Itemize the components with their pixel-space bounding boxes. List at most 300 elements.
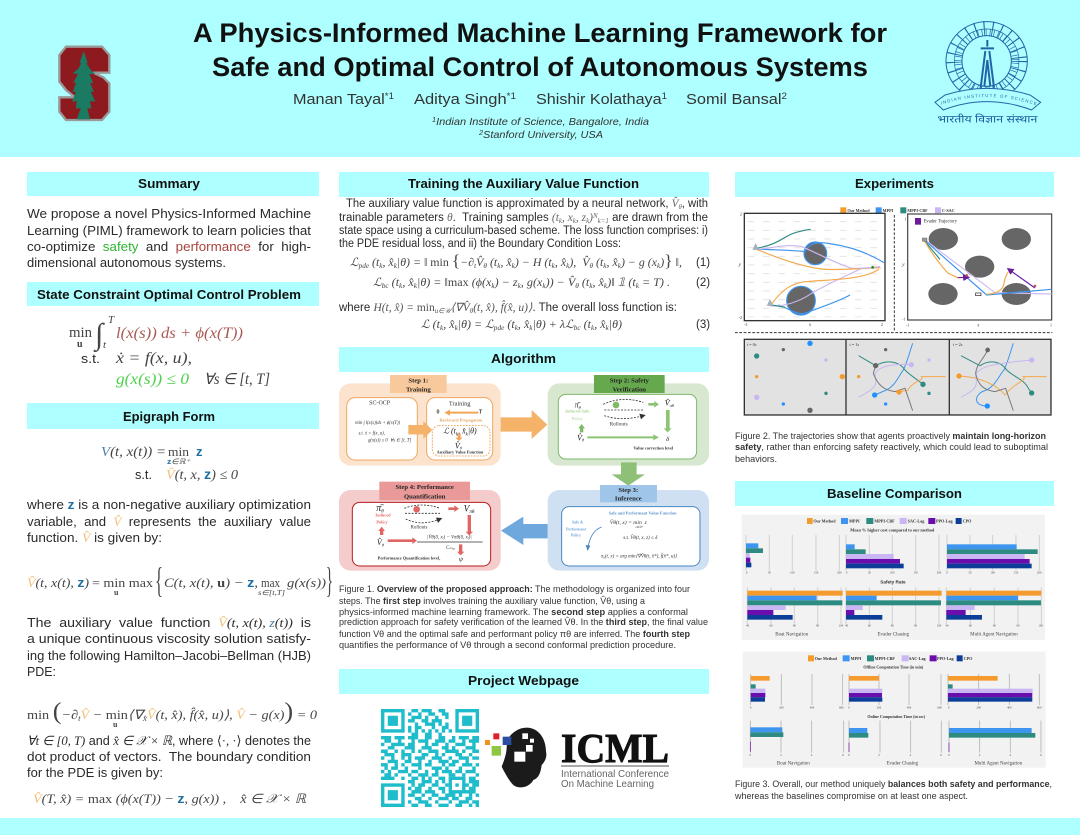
equation 2: ) − z: [494, 277, 518, 289]
logo: Stanford: [59, 47, 109, 120]
auxiliary value equation: max: [261, 575, 280, 590]
HJB equation: − min⟨∇: [92, 707, 142, 722]
figure 1 caption: quantifies the performance of Vθ through a second conformal prediction procedure.: [339, 640, 676, 650]
authors: *1: [507, 91, 516, 101]
training text: , x: [562, 212, 574, 224]
equation 2: k: [491, 282, 496, 290]
optimal control equation: s.t.: [81, 351, 100, 366]
bars: mean cost: 50: [968, 571, 972, 575]
plot: boat navigation trajectories: 2: [740, 212, 742, 217]
logo: ICML: On Machine Learning: [561, 779, 654, 790]
training text: The auxiliary value function is approximated by a neural network, V̂: [346, 198, 679, 210]
summary text: Learning (PIML) framework to learn policies that: [27, 223, 311, 238]
heading: algorithm: [339, 347, 709, 372]
where H text: θ: [470, 307, 474, 315]
step 2: safety verification: Induced Safe: [565, 409, 589, 414]
plot: evader chasing trajectories: 1: [1050, 323, 1052, 328]
step 4: performance quantification: Induced: [375, 513, 391, 518]
equation 2: max (ϕ(x: [448, 277, 490, 289]
divider: vertical: [893, 215, 896, 331]
step 1: training: k: [466, 432, 469, 437]
plot: boat navigation trajectories: y: [738, 262, 742, 268]
bars: online computation time: [750, 721, 1042, 757]
equation 2: k: [399, 282, 403, 290]
equation 1: k: [657, 262, 661, 270]
equation 2: |θ) = ‖: [417, 277, 448, 289]
equation 3: |θ): [609, 319, 622, 331]
HJB equation: u: [113, 720, 118, 729]
bars: mean cost: 100: [790, 571, 795, 575]
equation 1: (t: [487, 257, 498, 269]
bars: online computation time: 6: [1040, 753, 1042, 757]
step 4: performance quantification: π̄: [376, 503, 381, 514]
bars: safety rate: 40: [945, 624, 949, 628]
HJB equation: V̂: [147, 707, 158, 722]
optimal control equation: min: [69, 325, 92, 341]
optimal control equation: ∫: [93, 318, 105, 353]
epigraph equation: V̂(t, x, z) ≤ 0: [166, 467, 238, 482]
step 2: safety verification: Rollouts: [610, 421, 628, 427]
divider: horizontal: [735, 331, 1052, 334]
step 1: training: |θ): [468, 427, 477, 436]
step 3: inference: Policy: [571, 533, 581, 538]
chart: computation time: Boat Navigation: [777, 762, 810, 767]
heading: state constraint: [27, 282, 319, 306]
bars: offline computation time: 600: [937, 706, 942, 710]
bars: online computation time: 0: [750, 753, 752, 757]
title: Safe and Optimal Control of Autonomous Systems: [212, 52, 868, 82]
heading: state constraint: State Constraint Optimal Control Problem: [37, 287, 301, 302]
bars: safety rate: 60: [868, 624, 871, 628]
optimal control equation: ∀s ∈ [t, T]: [204, 371, 270, 388]
boundary condition text: for the PDE is given by:: [27, 765, 163, 780]
equation 1: min {−∂: [430, 251, 474, 270]
training text: , z: [576, 212, 587, 224]
training text: trainable parameters θ. Training samples (t: [339, 212, 559, 224]
bars: online computation time: 4: [1010, 753, 1012, 757]
equation 3: k: [529, 324, 533, 332]
authors: Aditya Singh: [414, 91, 498, 108]
equation 3: |θ) + λℒ: [533, 319, 574, 331]
HJB equation: [27, 699, 318, 729]
equation 2: k: [414, 282, 418, 290]
training text: k: [586, 217, 590, 225]
optimal control equation: t: [103, 339, 107, 351]
bars: offline computation time: 200: [877, 706, 882, 710]
bars: mean cost: 100: [890, 571, 895, 575]
equation 2: k: [636, 282, 640, 290]
equation 2: k: [604, 282, 608, 290]
bars: offline computation time: 0: [948, 706, 950, 710]
plot: evader chasing trajectories: [901, 214, 1052, 329]
step 4: performance quantification: Cₘₐₓ: [446, 546, 456, 551]
figure 2 caption: [735, 431, 1048, 464]
bars: offline computation time: 0: [848, 706, 850, 710]
auxiliary value equation: V̂(t, x(t), z): [27, 575, 89, 590]
step 2: safety verification: V̂: [577, 433, 582, 442]
bars: offline computation time: 400: [907, 706, 912, 710]
affiliations: 1: [432, 117, 436, 124]
panel: experiments: [735, 172, 1054, 464]
training text: , with: [682, 198, 708, 210]
legend: Our Method: [815, 656, 838, 661]
summary text: co-optimize safety and performance for high-: [27, 239, 311, 254]
affiliations: Stanford University, USA: [483, 129, 603, 141]
step 2: safety verification: π̄: [575, 401, 579, 410]
chart: cost and safety rate: Multi Agent Navigation: [970, 633, 1018, 638]
step 4: performance quantification: Rollouts: [411, 526, 427, 531]
bars: offline computation time: [750, 674, 1042, 710]
panel: project webpage: [339, 669, 709, 807]
optimal control equation: g(x(s)) ≤ 0: [116, 371, 189, 388]
step 1: training: Backward Propagation: [440, 417, 483, 422]
step 3: inference: [548, 485, 709, 571]
HJB equation: min (−∂: [27, 699, 77, 725]
equation 1: [350, 251, 710, 270]
epigraph explanation: where z is a non-negative auxiliary optimization: [26, 497, 311, 512]
bars: mean cost: 200: [937, 571, 942, 575]
step 1: training: Training: [406, 387, 431, 394]
equation 2: θ: [575, 282, 579, 290]
step 4: performance quantification: Step 4: Performance: [395, 484, 454, 491]
epigraph explanation: function. V̂ is given by:: [27, 530, 162, 545]
training text: the PDE residual loss, and ii) the Boundary Condition Loss:: [339, 238, 621, 250]
chart: computation time: Online Computation Time (in sec): [867, 714, 926, 719]
bars: safety rate: 90: [914, 624, 918, 628]
training text: θ: [678, 203, 682, 211]
panel: state constraint optimal control problem: [27, 282, 319, 388]
heading: experiments: [735, 172, 1054, 197]
chart: cost and safety rate: Safety Rate: [880, 580, 906, 585]
legend: C-SAC: [942, 208, 955, 213]
epigraph equation: z: [196, 444, 203, 459]
step 2: safety verification: Verification: [613, 387, 646, 394]
authors: 1: [662, 91, 667, 101]
legend: [808, 655, 973, 661]
bars: safety rate: 60: [770, 624, 773, 628]
figure 2 caption: Figure 2. The trajectories show that agents proactively maintain long-horizon: [735, 431, 1046, 441]
step 3: inference: Safe and Performant Value Function: [609, 511, 677, 516]
equation 2: k: [542, 282, 547, 290]
step 1: training: SC-OCP: [369, 400, 391, 406]
logo: Indian Institute of Science: भारतीय विज्ञान संस्थान: [937, 113, 1038, 125]
chart: cost and safety rate: Mean % higher cost compared to our method: [850, 528, 935, 533]
step 4: performance quantification: Policy: [376, 520, 388, 525]
legend: MPPI-CBF: [875, 656, 895, 661]
step 3: inference: Inference: [615, 496, 642, 503]
equation 2: [373, 275, 710, 290]
arrow: step 1 to step 2: [501, 410, 547, 439]
plot: multi-agent navigation time series: [744, 339, 1051, 415]
training text: state space using a curriculum-based scheme. The loss function comprises: i): [339, 225, 708, 237]
step 3: inference: Safe &: [572, 519, 584, 524]
epigraph explanation: [26, 497, 311, 545]
affiliations: Indian Institute of Science, Bangalore, India: [436, 116, 649, 128]
training text: ): [588, 212, 593, 224]
step 4: performance quantification: πθ: [469, 510, 475, 515]
auxiliary value equation: g(x(s)): [287, 575, 326, 590]
plot: multi-agent navigation time series: t = 2s: [953, 342, 963, 347]
panel: algorithm: [339, 347, 709, 650]
bars: mean cost: 50: [768, 571, 771, 575]
equation 2: (2): [696, 277, 710, 289]
HJB equation: t: [78, 714, 81, 723]
equation 1: , x̂: [555, 257, 567, 269]
optimal control equation: T: [108, 314, 115, 326]
equation 3: k: [591, 324, 595, 332]
bars: safety rate: 100: [937, 624, 942, 628]
step 3: inference: Performant: [566, 527, 587, 532]
equation 2: , x̂: [593, 277, 605, 289]
equation 1: , x̂: [607, 257, 619, 269]
plot: multi-agent navigation time series: t = 0s: [747, 342, 757, 347]
equation 3: (3): [696, 319, 710, 331]
equation 2: , g(x: [521, 277, 543, 289]
affiliations: [432, 116, 649, 141]
equation 1: k: [603, 262, 607, 270]
bars: mean cost: 150: [913, 571, 918, 575]
authors: Shishir Kolathaya: [536, 91, 653, 108]
plot: boat navigation trajectories: x: [808, 323, 812, 328]
chart: computation time: [743, 652, 1046, 768]
step 1: training: , x̂: [458, 427, 466, 436]
summary text: [27, 206, 311, 270]
heading: summary: [27, 172, 319, 196]
equation 1: θ: [589, 262, 594, 270]
legend: PPO-Lag: [937, 656, 955, 661]
equation 2: k: [589, 282, 593, 290]
heading: project webpage: Project Webpage: [468, 673, 579, 688]
legend: Our Method: [813, 519, 836, 524]
equation 3: bc: [574, 324, 582, 332]
equation 1: (t: [369, 257, 380, 269]
epigraph equation: [101, 444, 238, 482]
heading: training: Training the Auxiliary Value Function: [408, 176, 639, 191]
legend: [807, 518, 972, 524]
panel: summary: [27, 172, 319, 270]
bars: offline computation time: 600: [839, 706, 844, 710]
plot: evader chasing trajectories: 1: [904, 217, 906, 222]
step 2: safety verification: V̂: [665, 399, 670, 408]
where H text: (t, x̂), f̂(x̂, u)⟩: [473, 300, 533, 314]
step 4: performance quantification: θ: [382, 542, 385, 547]
step 4: performance quantification: θ: [381, 509, 384, 514]
panel: training the auxiliary value function: [338, 172, 710, 332]
step 4: performance quantification: V: [464, 505, 469, 515]
authors: 2: [782, 91, 787, 101]
equation 2: )) − V̂: [545, 275, 577, 289]
bars: online computation time: 2: [979, 753, 981, 757]
bars: mean cost: 150: [814, 571, 819, 575]
bars: safety rate: 80: [993, 624, 996, 628]
equation 3: pde: [493, 324, 504, 332]
equation 1: θ: [483, 262, 488, 270]
equation 1: pde: [358, 262, 369, 270]
equation 1: (t: [593, 257, 604, 269]
bars: offline computation time: 0: [750, 706, 752, 710]
step 3: inference: V̂θ(t, x) = min z: [610, 519, 648, 526]
chart: cost and safety rate: [742, 515, 1045, 640]
HJB equation: (t, x̂), f̂(x̂, u)⟩, V̂ − g(x)) = 0: [156, 699, 315, 725]
logo: ICML: [485, 725, 669, 790]
authors: *1: [385, 91, 394, 101]
plot: evader chasing trajectories: -1: [902, 317, 905, 322]
chart: cost and safety rate: Boat Navigation: [775, 633, 809, 638]
legend: MPPI-CBF: [874, 519, 895, 524]
figure 2 plots: [735, 207, 1052, 415]
bars: mean cost: [746, 535, 1042, 575]
step 1: training: θ: [460, 446, 462, 451]
equation 1: } ‖,: [664, 251, 682, 270]
step 3: inference: Step 3:: [618, 487, 638, 494]
training text: k: [559, 217, 563, 225]
step 1: training: V̂: [455, 441, 460, 450]
bars: offline computation time: 600: [1037, 706, 1042, 710]
legend: MPPI: [883, 208, 894, 213]
figure 3 caption: Figure 3. Overall, our method uniquely balances both safety and performance,: [735, 779, 1052, 789]
legend: MPPI: [849, 519, 860, 524]
training text: are drawn from the: [609, 212, 708, 224]
figure 1 caption: [339, 584, 708, 650]
panel: baseline comparison: [734, 481, 1054, 801]
step 2: safety verification: [548, 375, 709, 466]
legend: Our Method: [847, 208, 870, 213]
equation 3: , x̂: [518, 319, 530, 331]
title: A Physics-Informed Machine Learning Framework for: [193, 18, 887, 48]
where H text: ⟨∇V̂: [451, 300, 472, 314]
legend: [840, 207, 955, 213]
heading: summary: Summary: [138, 176, 201, 191]
chart: computation time: Offline Computation Time (in min): [863, 665, 924, 670]
equation 1: k: [497, 262, 501, 270]
bars: safety rate: 100: [839, 624, 844, 628]
step 1: training: 0: [437, 410, 440, 416]
heading: training: [339, 172, 709, 197]
bars: online computation time: 2: [878, 753, 880, 757]
bars: safety rate: 90: [1016, 624, 1020, 628]
step 2: safety verification: Step 2: Safety: [610, 378, 650, 385]
equation 1: ): [659, 257, 664, 269]
bars: mean cost: 0: [846, 571, 848, 575]
bars: safety rate: 60: [969, 624, 972, 628]
HJB explanation: The auxiliary value function V̂(t, x(t), z(t)) is: [27, 615, 312, 630]
bars: mean cost: 200: [1037, 571, 1042, 575]
legend: PPO-Lag: [936, 519, 954, 524]
step 3: inference: s.t. V̂θ(t, x, z) ≤ δ: [623, 535, 658, 541]
step 1: training: k: [456, 432, 459, 437]
plot: multi-agent navigation time series: t = 1s: [849, 342, 859, 347]
equation 3: , x̂: [594, 319, 606, 331]
HJB explanation: PDE:: [27, 664, 56, 679]
heading: experiments: Experiments: [855, 176, 934, 191]
plot: evader chasing trajectories: x: [976, 324, 980, 329]
legend: MPPI-CBF: [907, 208, 928, 213]
boundary condition text: [27, 733, 311, 780]
equation 1: (1): [696, 257, 710, 269]
epigraph equation: s.t.: [135, 468, 152, 482]
step 2: safety verification: θ: [582, 438, 585, 443]
authors: Somil Bansal: [686, 91, 774, 108]
step 3: inference: z∈ℝ⁺: [634, 525, 644, 529]
equation 1: ) − H (t: [514, 257, 553, 269]
bars: mean cost: 200: [837, 571, 842, 575]
step 1: training: ℒ (t: [443, 427, 456, 436]
chart: cost and safety rate: Evader Chasing: [877, 633, 910, 638]
step 4: performance quantification: [339, 482, 501, 571]
chart: computation time: Evader Chasing: [886, 762, 919, 767]
step 4: performance quantification: Performance Quantification level,: [378, 555, 440, 560]
step 1: training: Step 1:: [408, 378, 428, 385]
bars: mean cost: 150: [1014, 571, 1019, 575]
heading: epigraph form: Epigraph Form: [123, 409, 215, 424]
heading: project webpage: [339, 669, 709, 694]
heading: algorithm: Algorithm: [491, 351, 556, 366]
bars: safety rate: 100: [1038, 624, 1043, 628]
step 4: performance quantification: |V̂θ(0, xᵢ) − Vπθ(0, xᵢ)|: [427, 535, 472, 541]
figure 1 caption: function Vθ and the optimal safe and performant policy πθ are inferred. The fourth step: [339, 629, 691, 639]
plot: evader chasing trajectories: y: [901, 262, 905, 268]
panel: epigraph form: [26, 403, 333, 806]
bars: mean cost: 50: [868, 571, 871, 575]
figure 1 caption: steps. The first step involves training the auxiliary value function, V̂θ, using a: [339, 596, 645, 606]
bars: online computation time: 6: [842, 753, 844, 757]
step 1: training: [339, 375, 501, 466]
auxiliary value equation: = min max: [92, 575, 154, 590]
step 2: safety verification: Policy: [572, 416, 584, 421]
bars: mean cost: 100: [990, 571, 995, 575]
heading: epigraph form: [27, 403, 319, 429]
authors: [293, 91, 787, 108]
step 1: training: Auxiliary Value Function: [437, 450, 484, 455]
bars: offline computation time: 400: [810, 706, 815, 710]
bars: safety rate: 40: [746, 624, 750, 628]
where H text: where H(t, x̂) = min: [339, 302, 435, 314]
HJB explanation: a unique continuous viscosity solution satisfy-: [27, 631, 311, 646]
optimal control equation: l(x(s)) ds + ϕ(x(T)): [116, 325, 243, 342]
HJB explanation: [27, 615, 312, 679]
equation 2: (t: [389, 277, 400, 289]
bars: safety rate: [746, 587, 1043, 628]
step 1: training: T: [479, 410, 483, 416]
boundary condition text: ∀t ∈ [0, T) and x̂ ∈ 𝒳 × ℝ, where ⟨·, ·⟩ denotes the: [27, 733, 311, 748]
equation 3: (t: [504, 319, 516, 331]
step 2: safety verification: πθ: [670, 403, 675, 408]
equation 3: (t: [581, 319, 592, 331]
authors: Manan Tayal: [293, 91, 378, 108]
epigraph explanation: variable, and V̂ represents the auxiliary value: [27, 514, 311, 529]
arrow: step 3 to step 4: [501, 517, 548, 545]
bars: mean cost: 0: [946, 571, 948, 575]
chart: computation time: Multi Agent Navigation: [974, 762, 1023, 767]
equation 3: [421, 319, 710, 332]
auxiliary value equation: s∈[t,T]: [258, 589, 285, 597]
equation 1: t: [474, 262, 477, 270]
equation 3: k: [440, 324, 444, 332]
step 3: inference: π: [601, 555, 603, 560]
bars: online computation time: 2: [780, 753, 782, 757]
legend: SAC-Lag: [908, 519, 925, 524]
optimal control equation: ẋ = f(x, u),: [115, 350, 192, 367]
step 4: performance quantification: ψ: [459, 556, 464, 563]
equation 1: k: [566, 262, 570, 270]
equation 2: k: [518, 282, 522, 290]
step 1: training: Training: [449, 401, 471, 408]
equation 1: k: [512, 262, 516, 270]
HJB equation: V̂: [81, 707, 92, 722]
equation 1: k: [618, 262, 622, 270]
auxiliary value equation: C(t, x(t), u) − z,: [164, 575, 258, 590]
where H text: u∈𝒰: [435, 307, 453, 315]
